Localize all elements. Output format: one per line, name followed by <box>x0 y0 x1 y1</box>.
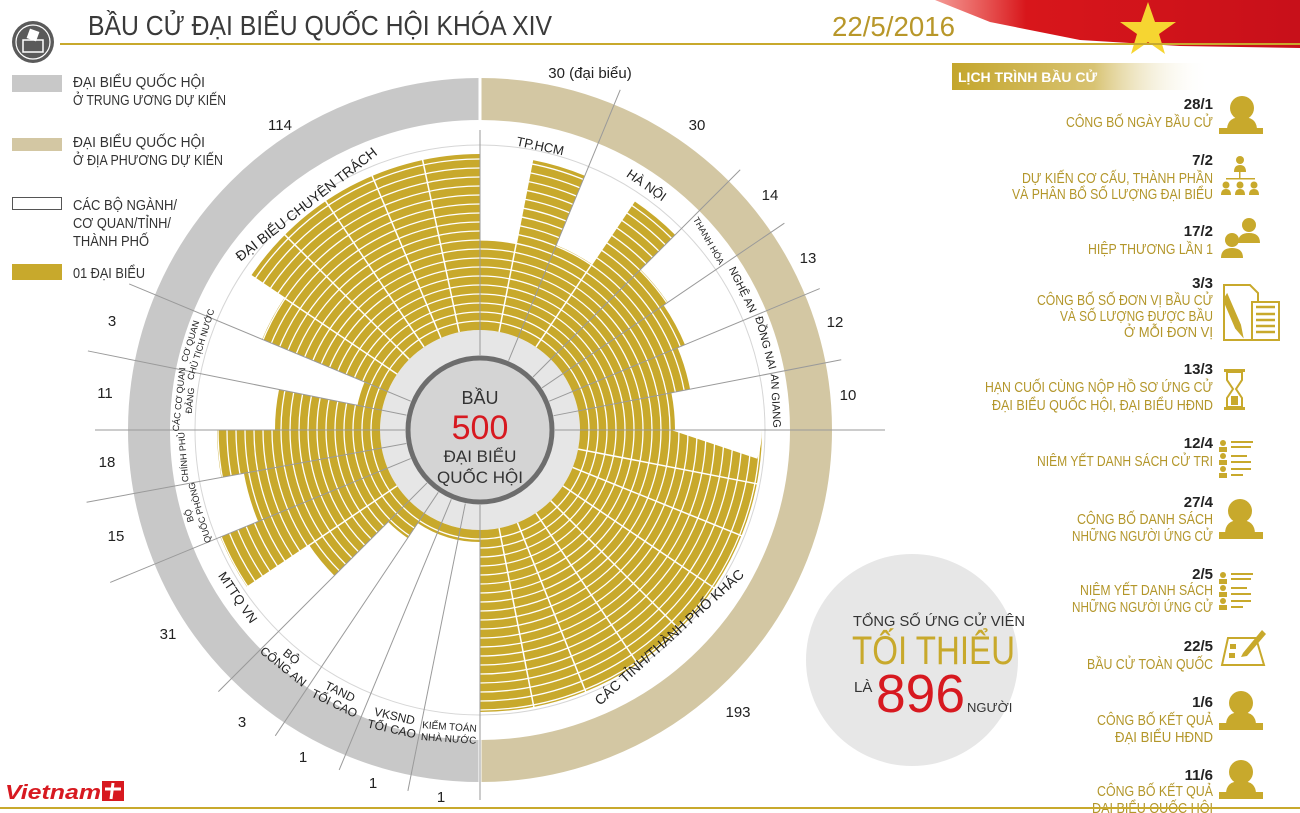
icon: document calculator <box>1224 285 1279 340</box>
center label: ĐẠI BIỂU <box>444 447 516 466</box>
item 12/4: NIÊM YẾT DANH SÁCH CỬ TRI <box>1037 452 1213 470</box>
callout: total candidates: 896 <box>876 664 965 724</box>
item 12/4: 12/4 <box>1184 435 1214 452</box>
item 3/3: VÀ SỐ LƯỢNG ĐƯỢC BẦU <box>1060 307 1213 325</box>
icon: announcer 11/6 <box>1219 760 1263 799</box>
legend item: agencies: THÀNH PHỐ <box>73 232 149 250</box>
schedule icons <box>1219 96 1279 799</box>
legend item: agencies: CƠ QUAN/TỈNH/ <box>73 215 172 232</box>
sector labels: QUỐC PHÒNG <box>186 481 214 544</box>
center label: BẦU <box>461 387 499 408</box>
sector labels: TAND <box>323 679 358 705</box>
header rule <box>60 43 1300 45</box>
item 13/3 <box>985 361 1213 414</box>
item 1/6 <box>1097 694 1213 746</box>
legend item: agencies: CÁC BỘ NGÀNH/ <box>73 197 178 214</box>
legend item: central: ĐẠI BIỂU QUỐC HỘI <box>73 73 205 91</box>
sector counts: 31 <box>160 626 176 643</box>
item 1/6: ĐẠI BIỂU HĐND <box>1115 728 1213 746</box>
item 12/4 <box>1037 435 1214 470</box>
sector labels: CÔNG AN <box>257 643 310 690</box>
sector counts: 1 <box>437 789 445 806</box>
icon: org chart <box>1221 156 1259 195</box>
center label: 500 <box>452 409 508 447</box>
item 7/2: VÀ PHÂN BỔ SỐ LƯỢNG ĐẠI BIỂU <box>1012 185 1213 203</box>
item 27/4: 27/4 <box>1184 494 1214 511</box>
icon: candidate list <box>1219 572 1253 610</box>
sector counts: 3 <box>238 714 246 731</box>
item 22/5: BẦU CỬ TOÀN QUỐC <box>1087 655 1213 673</box>
icon: announcer 1/6 <box>1219 691 1263 730</box>
icon: voter list <box>1219 440 1253 478</box>
sector labels: MTTQ VN <box>215 569 260 626</box>
sector labels: ĐỒNG NAI <box>752 315 779 371</box>
title: BẦU CỬ ĐẠI BIỂU QUỐC HỘI KHÓA XIV <box>88 9 552 41</box>
callout: total candidates: TỔNG SỐ ỨNG CỬ VIÊN <box>853 612 1025 630</box>
legend item: one delegate <box>12 264 145 282</box>
sector labels: CHỦ TỊCH NƯỚC <box>185 307 217 381</box>
sector counts: 3 <box>108 313 116 330</box>
sector labels: AN GIANG <box>768 374 782 428</box>
item 13/3: HẠN CUỐI CÙNG NỘP HỒ SƠ ỨNG CỬ <box>985 378 1213 396</box>
sector counts: 1 <box>299 749 307 766</box>
sector labels <box>171 134 782 747</box>
item 27/4 <box>1072 494 1214 545</box>
item 2/5: 2/5 <box>1192 566 1213 583</box>
legend item: one delegate: 01 ĐẠI BIỂU <box>73 264 145 282</box>
sector labels: TỐI CAO <box>309 686 360 721</box>
icon: consultation <box>1221 218 1260 258</box>
schedule list <box>985 96 1214 813</box>
item 13/3: ĐẠI BIỂU QUỐC HỘI, ĐẠI BIỂU HĐND <box>992 396 1213 414</box>
item 22/5 <box>1087 638 1213 673</box>
icon: hourglass <box>1224 369 1245 410</box>
item 11/6: CÔNG BỐ KẾT QUẢ <box>1097 782 1213 800</box>
sector labels: ĐẢNG <box>183 387 197 414</box>
sector labels: BỘ <box>183 508 196 523</box>
center disc <box>408 358 552 502</box>
sector labels: TP.HCM <box>515 134 565 158</box>
item 1/6: 1/6 <box>1192 694 1213 711</box>
legend item: local: Ở ĐỊA PHƯƠNG DỰ KIẾN <box>73 151 223 169</box>
sector counts: 30 (đại biểu) <box>548 65 632 82</box>
legend item: agencies <box>12 197 178 250</box>
sector labels: CÁC CƠ QUAN <box>171 367 188 432</box>
logo: Vietnam+: Vietnam <box>5 782 101 804</box>
sector labels: VKSND <box>373 705 417 728</box>
sector labels: CHÍNH PHỦ <box>175 432 191 482</box>
sector labels: ĐẠI BIỂU CHUYÊN TRÁCH <box>232 143 380 264</box>
sector labels: NHÀ NƯỚC <box>421 730 477 747</box>
sector counts: 114 <box>268 117 292 134</box>
item 17/2 <box>1088 223 1213 258</box>
center label: QUỐC HỘI <box>437 467 523 487</box>
sector labels: THANH HÓA <box>691 215 726 266</box>
sector counts: 18 <box>99 454 115 471</box>
callout: total candidates: TỐI THIỂU <box>852 626 1015 673</box>
sector labels: HÀ NỘI <box>624 166 669 204</box>
item 22/5: 22/5 <box>1184 638 1213 655</box>
sector labels: CÁC TỈNH/THÀNH PHỐ KHÁC <box>591 565 747 708</box>
icon: speaker <box>1219 96 1263 134</box>
item 27/4: CÔNG BỐ DANH SÁCH <box>1077 510 1213 528</box>
sector counts: 1 <box>369 775 377 792</box>
legend item: local: ĐẠI BIỂU QUỐC HỘI <box>73 133 205 151</box>
flag banner <box>935 0 1300 54</box>
logo: Vietnam+ <box>5 781 124 804</box>
legend item: central <box>12 73 226 109</box>
item 11/6: 11/6 <box>1185 767 1213 784</box>
legend <box>12 73 226 282</box>
icon: ballot <box>1222 630 1266 665</box>
item 2/5: NIÊM YẾT DANH SÁCH <box>1080 582 1213 599</box>
item 7/2: 7/2 <box>1192 152 1213 169</box>
sector labels: BỘ <box>280 645 303 668</box>
bottom rule <box>0 807 1300 809</box>
schedule header: LỊCH TRÌNH BẦU CỬ <box>958 68 1098 85</box>
legend item: central: Ở TRUNG ƯƠNG DỰ KIẾN <box>73 91 226 109</box>
sector labels: TỐI CAO <box>366 716 417 741</box>
sector counts <box>97 65 856 806</box>
sector counts: 193 <box>725 704 751 721</box>
callout: total candidates: LÀ <box>854 679 872 696</box>
sector labels: KIỂM TOÁN <box>422 718 477 735</box>
item 1/6: CÔNG BỐ KẾT QUẢ <box>1097 711 1213 729</box>
schedule header <box>952 63 1210 90</box>
center label <box>437 387 523 487</box>
sector counts: 14 <box>762 187 778 204</box>
item 28/1: 28/1 <box>1184 96 1213 113</box>
item 2/5: NHỮNG NGƯỜI ỨNG CỬ <box>1072 598 1213 616</box>
radial chart <box>87 65 885 806</box>
sector counts: 12 <box>827 314 843 331</box>
item 3/3: Ở MỖI ĐƠN VỊ <box>1124 323 1213 341</box>
item 11/6 <box>1092 767 1213 813</box>
sector counts: 15 <box>108 528 124 545</box>
item 7/2: DỰ KIẾN CƠ CẤU, THÀNH PHẦN <box>1022 170 1213 187</box>
item 17/2: 17/2 <box>1184 223 1213 240</box>
item 7/2 <box>1012 152 1213 203</box>
legend item: local <box>12 133 223 169</box>
sector counts: 11 <box>97 385 113 402</box>
item 3/3 <box>1037 275 1213 341</box>
sector labels: CƠ QUAN <box>180 319 202 363</box>
item 27/4: NHỮNG NGƯỜI ỨNG CỬ <box>1072 527 1213 545</box>
callout: total candidates: NGƯỜI <box>967 700 1012 715</box>
item 28/1 <box>1066 96 1213 131</box>
sector labels: NGHỆ AN <box>726 265 759 315</box>
icon: ballot box <box>12 21 54 63</box>
gold bars <box>289 239 671 621</box>
item 28/1: CÔNG BỐ NGÀY BẦU CỬ <box>1066 113 1213 131</box>
sector counts: 10 <box>840 387 856 404</box>
item 3/3: CÔNG BỐ SỐ ĐƠN VỊ BẦU CỬ <box>1037 291 1213 309</box>
outer ring <box>149 70 811 790</box>
callout: total candidates <box>806 554 1025 766</box>
date: 22/5/2016 <box>832 11 955 42</box>
item 2/5 <box>1072 566 1213 616</box>
icon: speaker 2 <box>1219 499 1263 539</box>
item 13/3: 13/3 <box>1184 361 1213 378</box>
sector counts: 30 <box>689 117 705 134</box>
item 17/2: HIỆP THƯƠNG LẦN 1 <box>1088 241 1213 258</box>
item 3/3: 3/3 <box>1192 275 1213 292</box>
sector counts: 13 <box>800 250 816 267</box>
